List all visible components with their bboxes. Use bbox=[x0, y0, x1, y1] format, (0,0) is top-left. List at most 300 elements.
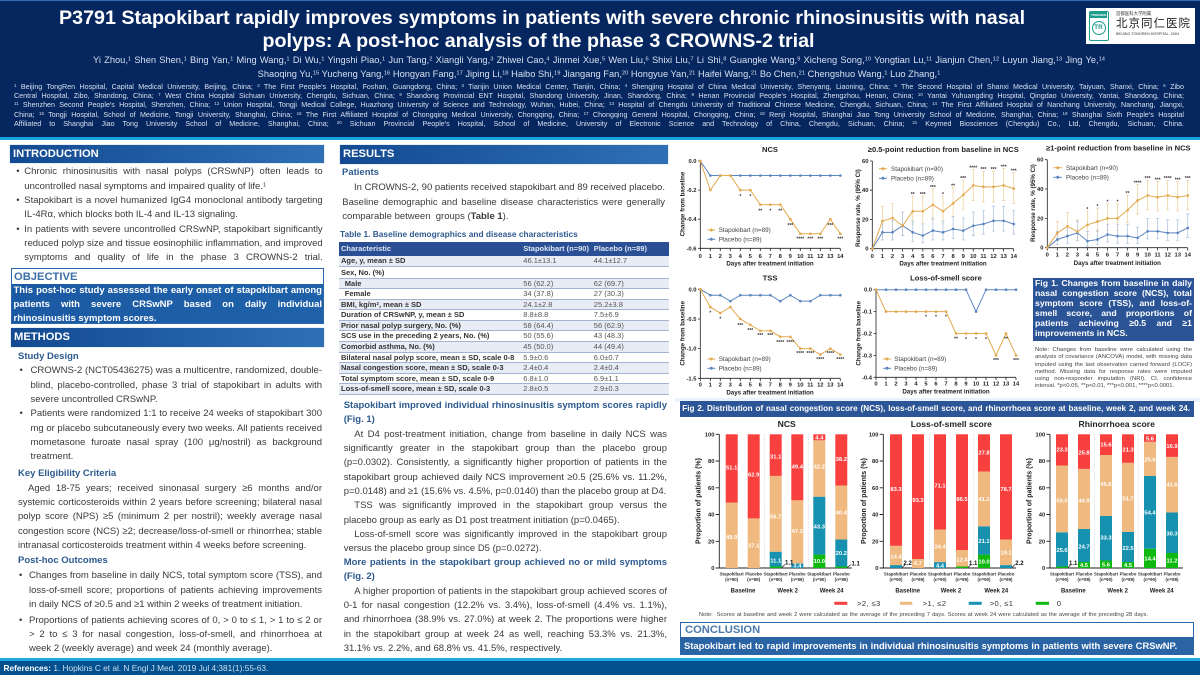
chart: TSS change from baseline: * bbox=[719, 316, 721, 322]
bar chart: NCS distribution: 1.1 bbox=[852, 562, 861, 568]
chart: at least 0.5-point reduction: 1 bbox=[881, 254, 885, 260]
text: patients summary bbox=[342, 182, 665, 222]
bar chart: loss-of-smell distribution: 71.1 bbox=[934, 483, 946, 489]
chart: TSS change from baseline: 5 bbox=[749, 382, 753, 388]
chart: at least 1-point reduction: Stapokibart (n=90) bbox=[1066, 165, 1118, 172]
bar chart: rhinorrhoea distribution: 16.9 bbox=[1166, 444, 1178, 450]
subheading: patients: Patients bbox=[342, 166, 379, 178]
authors: Shaoqing Yu,15 Yucheng Yang,16 Hongyan Fang,17 Jiping Li,18 Haibo Shi,19 Jiangang Fan,20 Hongyue Yan,21 Haifei Wang,21 Bo Chen,21 Chengshuo Wang,1 Luo Zhang,1 bbox=[258, 68, 940, 78]
table: baseline characteristics: 46.1±13.1 bbox=[523, 256, 557, 265]
chart: at least 1-point reduction: Response rate, % (95% CI) bbox=[1030, 164, 1037, 242]
chart: loss-of-smell score change: 13 bbox=[1003, 382, 1010, 388]
chart: at least 1-point reduction: 10 bbox=[1144, 252, 1151, 258]
chart: TSS change from baseline: Placebo (n=89) bbox=[719, 366, 762, 372]
chart: NCS change from baseline: -0.6 bbox=[686, 246, 697, 252]
bar chart: rhinorrhoea distribution: Placebo bbox=[1120, 572, 1137, 576]
chart: at least 1-point reduction: 11 bbox=[1155, 252, 1161, 258]
chart: at least 1-point reduction bbox=[1030, 143, 1192, 267]
chart: at least 1-point reduction: ≥1-point reduction from baseline in NCS bbox=[1046, 143, 1191, 152]
chart: at least 1-point reduction: 12 bbox=[1164, 252, 1171, 258]
text: study design bullets: CROWNS-2 (NCT05436275) was a multicentre, randomized, double- bbox=[30, 365, 322, 376]
text: fig 2 findings: in the stapokibart group at week 24 as well, reaching 53.3% vs. 21.3%, bbox=[344, 629, 667, 640]
chart: NCS change from baseline: 8 bbox=[779, 254, 783, 260]
table: baseline characteristics: 62 (69.7) bbox=[594, 279, 624, 288]
chart: TSS change from baseline: Days after treatment initiation bbox=[726, 389, 814, 396]
text: introduction bullets: In patients with severe uncontrolled CRSwNP, stapokibart significantly bbox=[24, 224, 323, 235]
text: fig 1 findings: TSS was significantly improved in the stapokibart group versus the bbox=[354, 500, 667, 511]
bar chart: loss-of-smell distribution: 4.4 bbox=[936, 563, 945, 569]
logo: Beijing Tongren Hospital bbox=[1086, 8, 1195, 44]
bar chart: NCS distribution: Stapokibart bbox=[764, 572, 788, 576]
bar chart: rhinorrhoea distribution: 4.5 bbox=[1080, 563, 1089, 569]
text: post-hoc outcome bullets bbox=[19, 570, 322, 654]
subheading: symptom scores improved: Stapokibart improved individual rhinosinusitis symptom scores rapidly bbox=[344, 400, 667, 411]
bar chart: rhinorrhoea distribution: Week 2 bbox=[1107, 588, 1129, 594]
fig 1 note: method. Missing data for response rates were imputed bbox=[1035, 369, 1192, 375]
bar chart: rhinorrhoea distribution: Placebo bbox=[1076, 572, 1093, 576]
chart: at least 1-point reduction: 60 bbox=[1037, 158, 1044, 164]
bar chart: NCS distribution: (n=89) bbox=[747, 577, 761, 582]
chart: at least 1-point reduction: 4 bbox=[1086, 252, 1090, 258]
bar chart: rhinorrhoea distribution: (n=90) bbox=[1055, 577, 1069, 582]
chart: TSS change from baseline: **** bbox=[786, 340, 794, 346]
bar chart: NCS distribution: Week 2 bbox=[777, 588, 799, 594]
chart: at least 1-point reduction: * bbox=[1117, 200, 1119, 206]
chart: NCS change from baseline: -0.4 bbox=[686, 217, 697, 223]
chart: loss-of-smell score change: * bbox=[925, 314, 927, 320]
chart: loss-of-smell score change: 3 bbox=[904, 382, 908, 388]
bar chart: loss-of-smell distribution: 86.5 bbox=[956, 497, 968, 503]
chart: at least 0.5-point reduction: 10 bbox=[970, 254, 977, 260]
title: polyps: A post-hoc analysis of the phase 3 CROWNS-2 trial bbox=[262, 30, 815, 52]
chart: at least 1-point reduction: 8 bbox=[1126, 252, 1130, 258]
title bbox=[59, 6, 1025, 52]
bar chart: loss-of-smell distribution: Baseline bbox=[895, 588, 921, 594]
bar chart: rhinorrhoea distribution: 45.6 bbox=[1100, 482, 1112, 488]
table: baseline characteristics: 2.9±0.3 bbox=[594, 384, 619, 393]
bar chart: rhinorrhoea distribution: (n=89) bbox=[1077, 577, 1091, 582]
table: baseline characteristics: Prior nasal polyp surgery, No. (%) bbox=[341, 321, 461, 330]
bar chart: loss-of-smell distribution: (n=89) bbox=[999, 577, 1013, 582]
chart: NCS change from baseline: * bbox=[769, 209, 771, 215]
chart: at least 1-point reduction: 6 bbox=[1106, 252, 1110, 258]
bar chart: NCS distribution: Stapokibart bbox=[807, 572, 832, 576]
text: study design bullets bbox=[20, 365, 322, 462]
chart: at least 1-point reduction: *** bbox=[1155, 178, 1161, 184]
text: post-hoc outcome bullets: week 2 (weekly average) and week 24 (monthly average). bbox=[29, 643, 272, 654]
chart: TSS change from baseline: -1.5 bbox=[686, 376, 697, 382]
heading: conclusion: CONCLUSION bbox=[685, 624, 760, 636]
text: study design bullets: blind, placebo-controlled, phase 3 trial of stapokibart in adults with bbox=[30, 380, 322, 391]
chart: TSS change from baseline: -1.0 bbox=[686, 347, 696, 353]
bar chart: rhinorrhoea distribution: (n=89) bbox=[1165, 577, 1179, 582]
subheading: post-hoc outcomes: Post-hoc Outcomes bbox=[18, 554, 108, 566]
bar chart: loss-of-smell distribution: Placebo bbox=[998, 572, 1015, 576]
chart: at least 0.5-point reduction: *** bbox=[960, 176, 966, 182]
fig 1 caption: smell score, and proportions of bbox=[1035, 308, 1192, 318]
chart: loss-of-smell score change: 5 bbox=[924, 382, 928, 388]
bar chart: loss-of-smell distribution bbox=[861, 419, 1024, 594]
affiliations: Central Hospital, Zibo, Shandong, China; 7 West China Hospital Sichuan University, Chengdu, Sichuan, China; 8 Shandong Provincial ENT Hospital, Shandong University, Jinan, Shandong, China; 9 Henan Provincial People's Hospital, Zhengzhou, Henan, China; 10 Yantai Yuhuangding Hospital, Qingdao University, Yantai, Shandong, China; bbox=[14, 92, 1184, 100]
chart: TSS change from baseline: 8 bbox=[779, 382, 783, 388]
table: baseline characteristics: 7.5±6.9 bbox=[594, 310, 619, 319]
table: baseline characteristics: Total symptom score, mean ± SD, scale 0-9 bbox=[341, 374, 494, 383]
chart: at least 1-point reduction: 2 bbox=[1066, 252, 1069, 258]
text: • bbox=[16, 224, 20, 235]
subheading: symptom scores improved: (Fig. 1) bbox=[344, 414, 375, 425]
table: baseline characteristics: Female bbox=[345, 289, 371, 298]
bar chart: loss-of-smell distribution: 19.1 bbox=[1000, 550, 1012, 556]
logo text: 首都医科大学附属 bbox=[1116, 11, 1151, 16]
text: objective statement: rhinosinusitis symptom scores. bbox=[14, 313, 157, 324]
bar chart: loss-of-smell distribution: 41.1 bbox=[978, 497, 990, 503]
fig 1 caption: nasal congestion score (NCS), total bbox=[1035, 288, 1192, 298]
bar chart: loss-of-smell distribution: 80 bbox=[872, 459, 878, 465]
chart: NCS change from baseline: Days after treatment initiation bbox=[726, 260, 814, 268]
chart: TSS change from baseline: **** bbox=[826, 351, 834, 357]
table: baseline characteristics: 25.2±3.8 bbox=[594, 300, 623, 309]
text: introduction bullets: uncontrolled nasal symptoms and impaired quality of life.1 bbox=[24, 181, 266, 192]
chart: at least 1-point reduction: * bbox=[1107, 200, 1109, 206]
bar chart: rhinorrhoea distribution: 5.6 bbox=[1102, 562, 1111, 568]
panel: objective bbox=[10, 268, 324, 324]
bar chart: loss-of-smell distribution: Stapokibart bbox=[884, 572, 909, 576]
bar chart: NCS distribution: (n=90) bbox=[725, 577, 739, 582]
bar chart: loss-of-smell distribution: Week 24 bbox=[984, 588, 1009, 594]
subheading: mild symptoms bbox=[344, 557, 667, 582]
heading: introduction bbox=[10, 145, 324, 163]
text: post-hoc outcome bullets: loss-of-smell score; proportions of patients achieving improvements bbox=[29, 585, 322, 596]
chart: at least 0.5-point reduction: 6 bbox=[931, 254, 935, 260]
text: fig 2 findings: 0-1 for nasal congestion (12.2% vs. 3.4%), loss-of-smell (4.4% vs. 1.1%), bbox=[344, 600, 667, 611]
chart: NCS change from baseline: 7 bbox=[769, 254, 772, 260]
bar chart: rhinorrhoea distribution: (n=89) bbox=[1121, 577, 1135, 582]
chart: loss-of-smell score change: Placebo (n=89) bbox=[894, 366, 937, 372]
text: patients summary: In CROWNS-2, 90 patients received stapokibart and 89 received placebo. bbox=[354, 182, 665, 193]
text: study design bullets: Patients were randomized 1:1 to receive 24 weeks of stapokibart 300 bbox=[30, 408, 322, 419]
fig 1 note: imputed using the last observation carried forward (LOCF) bbox=[1035, 362, 1192, 368]
bar chart: rhinorrhoea distribution: 22.5 bbox=[1122, 546, 1134, 552]
chart: at least 1-point reduction: ** bbox=[1126, 191, 1129, 197]
chart: NCS change from baseline: **** bbox=[796, 237, 804, 243]
chart: loss-of-smell score change: Change from baseline bbox=[856, 300, 862, 366]
chart: NCS change from baseline: *** bbox=[807, 237, 813, 243]
chart: loss-of-smell score change: * bbox=[945, 314, 947, 320]
text: post-hoc outcome bullets: Proportions of patients achieving scores of 0, > 0 to ≤ 1, > 1 to ≤ 2 or bbox=[29, 615, 322, 626]
bar chart: NCS distribution: 10.0 bbox=[814, 559, 825, 565]
chart: TSS change from baseline: 13 bbox=[827, 382, 834, 388]
panel: conclusion bbox=[680, 622, 1194, 655]
text: fig 1 findings: At D4 post-treatment initiation, change from baseline in daily NCS was bbox=[354, 428, 667, 440]
text: fig 2 findings: A higher proportion of patients in the stapokibart group achieved scores of bbox=[354, 586, 667, 596]
table: baseline characteristics: 44 (49.4) bbox=[594, 342, 624, 351]
chart: at least 0.5-point reduction: 4 bbox=[911, 254, 915, 260]
bar chart: loss-of-smell distribution: 0 bbox=[875, 566, 878, 572]
table: baseline characteristics: Sex, No. (%) bbox=[341, 268, 384, 277]
text: study design bullets: severe uncontrolled CRSwNP. bbox=[30, 394, 158, 405]
table: baseline characteristics: 8.8±8.8 bbox=[523, 310, 548, 319]
bar chart: rhinorrhoea distribution: 14.4 bbox=[1144, 556, 1156, 562]
table: baseline characteristics: 5.9±0.6 bbox=[523, 353, 548, 362]
bar chart: rhinorrhoea distribution: 80 bbox=[1039, 459, 1045, 465]
chart: at least 0.5-point reduction: ** bbox=[911, 192, 915, 198]
bar chart: NCS distribution bbox=[696, 419, 861, 594]
chart: at least 1-point reduction: **** bbox=[1164, 176, 1172, 182]
chart: at least 0.5-point reduction: Stapokibart (n=90) bbox=[891, 166, 943, 173]
chart: TSS change from baseline: 12 bbox=[817, 382, 824, 388]
chart: at least 1-point reduction: 7 bbox=[1116, 252, 1119, 258]
chart: loss-of-smell score change: 0.0 bbox=[864, 288, 872, 294]
chart: loss-of-smell score change: -0.4 bbox=[862, 375, 873, 381]
chart: at least 1-point reduction: 20 bbox=[1037, 216, 1044, 222]
text: • bbox=[19, 570, 22, 581]
bar chart: rhinorrhoea distribution: 0 bbox=[1042, 566, 1045, 572]
chart: loss-of-smell score change: 2 bbox=[894, 382, 898, 388]
fig 1 note: analysis of covariance (ANCOVA) model, with missing data bbox=[1035, 354, 1192, 360]
chart: TSS change from baseline: 9 bbox=[789, 382, 793, 388]
chart: loss-of-smell score change: -0.1 bbox=[862, 310, 873, 316]
bar chart: rhinorrhoea distribution: 20 bbox=[1039, 539, 1045, 545]
chart: TSS change from baseline: **** bbox=[796, 351, 804, 357]
bar chart: rhinorrhoea distribution: 5.6 bbox=[1146, 437, 1155, 443]
bar chart: rhinorrhoea distribution: 21.3 bbox=[1122, 448, 1134, 454]
bar chart: loss-of-smell distribution: Placebo bbox=[910, 572, 927, 576]
chart: NCS change from baseline: 11 bbox=[807, 254, 814, 260]
chart: NCS change from baseline: *** bbox=[837, 237, 843, 243]
text: introduction bullets: symptoms and quality of life in the phase 3 CROWNS-2 trial. bbox=[24, 252, 323, 263]
bar chart: loss-of-smell distribution: 100 bbox=[869, 432, 878, 438]
text: patients summary: comparable between groups (Table 1). bbox=[342, 211, 508, 222]
bar chart: NCS distribution: 40 bbox=[708, 513, 714, 519]
bar chart: loss-of-smell distribution: (n=90) bbox=[977, 577, 991, 582]
chart: at least 0.5-point reduction: Response rate, % (95% CI) bbox=[855, 169, 862, 247]
bar chart: NCS distribution: Week 24 bbox=[820, 588, 844, 594]
bar chart: NCS distribution: 1.1 bbox=[785, 560, 794, 566]
chart: NCS change from baseline: 10 bbox=[797, 254, 804, 260]
bar chart: rhinorrhoea distribution: 11.2 bbox=[1167, 559, 1177, 565]
text: fig 1 findings: placebo group as early as D1 post treatment initiation (p=0.0465). bbox=[344, 515, 620, 526]
subheading: key eligibility criteria: Key Eligibility Criteria bbox=[18, 468, 116, 478]
chart: loss-of-smell score change bbox=[856, 273, 1020, 396]
bar chart: loss-of-smell distribution: 1.1 bbox=[969, 561, 978, 567]
text: • bbox=[16, 195, 20, 206]
bar chart: NCS distribution: 49.4 bbox=[792, 465, 804, 471]
bar chart: NCS distribution: Stapokibart bbox=[720, 572, 744, 576]
table: baseline characteristics: 24.1±2.8 bbox=[523, 300, 552, 309]
band behind fig 2 banner bbox=[675, 398, 1200, 402]
text: eligibility criteria: Aged 18-75 years; received sinonasal surgery ≥6 months and/or bbox=[28, 482, 322, 494]
bar chart: NCS distribution: 62.9 bbox=[748, 473, 760, 479]
bar chart: loss-of-smell distribution: (n=89) bbox=[955, 577, 969, 582]
table: baseline characteristics: Characteristic bbox=[341, 244, 391, 253]
table: baseline characteristics: 2.4±0.4 bbox=[523, 363, 548, 372]
bar chart: rhinorrhoea distribution: 25.8 bbox=[1078, 450, 1090, 456]
bar chart: rhinorrhoea distribution: Stapokibart bbox=[1138, 572, 1163, 576]
table: baseline characteristics: Bilateral nasal polyp score, mean ± SD, scale 0-8 bbox=[341, 353, 514, 362]
text: post-hoc outcome bullets: in daily NCS of ≥0.5 and ≥1 within 2 weeks of treatment initiation. bbox=[29, 599, 302, 610]
bar chart: NCS distribution: (n=90) bbox=[813, 577, 826, 582]
bar chart: NCS distribution: 51.1 bbox=[726, 466, 738, 472]
text: eligibility criteria: systemic corticosteroids within 2 years before screening; bilateral nasal bbox=[18, 497, 322, 508]
heading: objective: OBJECTIVE bbox=[14, 270, 77, 282]
bar chart: rhinorrhoea distribution: Stapokibart bbox=[1050, 572, 1075, 576]
affiliations: Affiliated to Shanghai Jiao Tong University School of Medicine, Shanghai, China; 20 Sichuan Provincial People's Hospital, School of Medicine, University of Electronic Science and Technology of China, Chengdu, Sichuan, China; 21 Keymed Biosciences (Chengdu) Co., Ltd, Chengdu, Sichuan, China. bbox=[14, 120, 1184, 128]
bar chart: NCS distribution: Placebo bbox=[745, 572, 762, 576]
fig 1 note: Note: Changes from baseline were calculated using the bbox=[1035, 347, 1192, 353]
bar chart: NCS distribution: Baseline bbox=[731, 588, 756, 594]
bar chart: loss-of-smell distribution: 14.4 bbox=[890, 555, 902, 561]
bar chart: rhinorrhoea distribution: 1.1 bbox=[1069, 561, 1078, 567]
logo text: 北京同仁医院 bbox=[1116, 18, 1191, 30]
chart: NCS change from baseline: Placebo (n=89) bbox=[719, 236, 762, 244]
bar chart: NCS distribution: 0 bbox=[711, 566, 714, 572]
fig 1 note: interval. *p<0.05, **p<0.01, ***p<0.001, ****p<0.0001. bbox=[1035, 383, 1174, 389]
chart: loss-of-smell score change: * bbox=[985, 337, 987, 343]
text: conclusion statement: Stapokibart led to rapid improvements in individual rhinosinusitis symptoms in patients with severe CRSwNP. bbox=[684, 640, 1177, 651]
table: baseline characteristics: Nasal congestion score, mean ± SD, scale 0-3 bbox=[341, 363, 504, 372]
chart: at least 0.5-point reduction: ** bbox=[951, 183, 955, 189]
chart: NCS change from baseline: 5 bbox=[749, 254, 753, 260]
text: post-hoc outcome bullets: > 2 to ≤ 3 for nasal congestion, loss-of-smell, and rhinorrhoea at bbox=[29, 629, 322, 640]
bar chart: rhinorrhoea distribution: Placebo bbox=[1164, 572, 1181, 576]
text: objective statement: This post-hoc study assessed the early onset of stapokibart among bbox=[14, 284, 322, 296]
chart: at least 1-point reduction: Days after treatment initiation bbox=[1074, 260, 1161, 267]
table: baseline characteristics: 56 (62.9) bbox=[594, 321, 624, 330]
chart: loss-of-smell score change: Stapokibart (n=89) bbox=[894, 356, 946, 363]
text: study design bullets: mometasone furoate nasal spray (100 μg/nostril) as background bbox=[30, 437, 322, 448]
chart: at least 0.5-point reduction: 2 bbox=[891, 254, 894, 260]
bar chart: loss-of-smell distribution: 83.3 bbox=[890, 487, 902, 493]
bar chart: loss-of-smell distribution: 12.4 bbox=[956, 557, 968, 563]
chart: at least 0.5-point reduction: *** bbox=[920, 192, 926, 198]
bar chart: NCS distribution: 42.2 bbox=[814, 465, 825, 471]
chart: TSS change from baseline: 2 bbox=[719, 382, 722, 388]
chart: TSS change from baseline: 3 bbox=[729, 382, 733, 388]
logo text: BEIJING TONGREN HOSPITAL, CMU bbox=[1116, 32, 1179, 36]
chart: loss-of-smell score change: 9 bbox=[964, 382, 968, 388]
bar chart: rhinorrhoea distribution: 40 bbox=[1039, 513, 1045, 519]
table: baseline characteristics: BMI, kg/m2, mean ± SD bbox=[341, 300, 421, 309]
bar chart: loss-of-smell distribution: 78.7 bbox=[1000, 487, 1012, 493]
fig 1 caption: Fig 1. Changes from baseline in daily bbox=[1035, 278, 1192, 288]
heading: methods: METHODS bbox=[14, 331, 70, 343]
logo emblem: TR bbox=[1094, 24, 1103, 31]
bar chart: loss-of-smell distribution: 2.2 bbox=[1015, 561, 1024, 567]
table: baseline characteristics: Male bbox=[345, 279, 361, 288]
bar chart: loss-of-smell distribution: 24.4 bbox=[934, 545, 946, 551]
text: fig 1 findings: stapokibart group achieved daily NCS improvement ≥0.5 (25.6% vs. 11.2%, bbox=[344, 472, 667, 483]
chart: at least 1-point reduction: *** bbox=[1185, 176, 1191, 182]
text: fig 2 findings: 31.1% vs. 2.2%, and 68.8% vs. 41.5%, respectively. bbox=[344, 643, 562, 654]
affiliations: 1 Beijing TongRen Hospital, Capital Medical University, Beijing, China; 2 The First People's Hospital, Foshan, Guangdong, China; 3 Tianjin Union Medical Center, Tianjin, China; 4 Shengjing Hospital of China Medical University, Shenyang, Liaoning, China; 5 The Second Hospital of Shanxi Medical University, Taiyuan, Shanxi, China; 6 Zibo bbox=[14, 82, 1184, 90]
chart: at least 1-point reduction: Placebo (n=89) bbox=[1066, 174, 1109, 182]
chart: NCS change from baseline bbox=[680, 145, 844, 268]
chart: NCS change from baseline: 1 bbox=[709, 254, 713, 260]
bar chart: loss-of-smell distribution: Week 2 bbox=[941, 588, 962, 594]
chart: loss-of-smell score change: 6 bbox=[934, 382, 938, 388]
footer: references bbox=[0, 658, 1200, 675]
table: baseline characteristics bbox=[339, 242, 669, 395]
chart: at least 0.5-point reduction: 20 bbox=[862, 218, 868, 224]
chart: NCS change from baseline: NCS bbox=[762, 145, 778, 154]
text: fig 1 findings: significantly greater in the stapokibart group than the placebo group bbox=[344, 443, 667, 454]
chart: NCS change from baseline: 2 bbox=[719, 254, 722, 260]
subheading: symptom scores improved bbox=[344, 400, 667, 425]
bar chart: NCS distribution: 43.3 bbox=[814, 525, 826, 531]
bar chart: loss-of-smell distribution: 2.2 bbox=[904, 561, 913, 567]
table: baseline characteristics: 6.0±0.7 bbox=[594, 353, 619, 362]
text: fig 1 findings: p=0.0148) and ≥1 (15.6% vs. 4.5%, p=0.0140) than the placebo group at D4. bbox=[344, 486, 666, 497]
bar chart: rhinorrhoea distribution: 33.3 bbox=[1100, 536, 1112, 542]
chart: NCS change from baseline: Stapokibart (n=89) bbox=[719, 227, 771, 234]
chart: TSS change from baseline: -0.5 bbox=[686, 317, 697, 323]
chart: NCS change from baseline: 0.0 bbox=[688, 159, 696, 165]
chart: loss-of-smell score change: 12 bbox=[993, 382, 999, 388]
bar chart: loss-of-smell distribution: (n=90) bbox=[933, 577, 947, 582]
bar chart: rhinorrhoea distribution: Week 24 bbox=[1150, 588, 1174, 594]
chart: TSS change from baseline: *** bbox=[747, 328, 753, 334]
chart: TSS change from baseline: *** bbox=[767, 333, 773, 339]
table: baseline characteristics: SCS use in the preceding 2 years, No. (%) bbox=[341, 331, 489, 340]
text: patients summary: Baseline demographic and baseline disease characteristics were generally bbox=[342, 197, 665, 208]
table: baseline characteristics: Placebo (n=89) bbox=[594, 244, 647, 253]
text: fig 1 findings bbox=[344, 428, 667, 554]
text: study design bullets: treatment. bbox=[30, 451, 73, 462]
chart: TSS change from baseline: *** bbox=[737, 323, 743, 329]
table: baseline characteristics: 2.4±0.4 bbox=[594, 363, 619, 372]
logo emblem bbox=[1089, 11, 1109, 41]
chart: at least 0.5-point reduction: *** bbox=[1011, 169, 1017, 175]
chart: at least 1-point reduction: *** bbox=[1145, 176, 1151, 182]
chart: at least 0.5-point reduction: * bbox=[942, 192, 944, 198]
table: baseline characteristics: Stapokibart (n=90) bbox=[523, 244, 589, 253]
bar chart: rhinorrhoea distribution: 24.7 bbox=[1078, 544, 1090, 550]
footer: references: References: 1. Hopkins C et al. N Engl J Med. 2019 Jul 4;381(1):55-63. bbox=[4, 663, 268, 673]
chart: at least 0.5-point reduction: 0 bbox=[871, 254, 874, 260]
chart: loss-of-smell score change: * bbox=[935, 314, 937, 320]
chart: TSS change from baseline: 1 bbox=[709, 382, 713, 388]
chart: at least 0.5-point reduction: Placebo (n=89) bbox=[891, 176, 934, 182]
table: baseline characteristics: 34 (37.8) bbox=[523, 289, 553, 298]
chart: NCS change from baseline: 12 bbox=[817, 254, 824, 260]
chart: at least 0.5-point reduction: 3 bbox=[901, 254, 905, 260]
fig 1 note: using non-responder imputation (NRI). CI, confidence bbox=[1035, 376, 1192, 382]
chart: loss-of-smell score change: 8 bbox=[954, 382, 958, 388]
chart: NCS change from baseline: Change from baseline bbox=[680, 171, 686, 236]
table: baseline characteristics: Duration of CRSwNP, y, mean ± SD bbox=[341, 310, 464, 319]
fig 1 caption: improvements in NCS. bbox=[1035, 328, 1128, 338]
text: • bbox=[16, 166, 20, 177]
chart: at least 0.5-point reduction: 5 bbox=[921, 254, 925, 260]
chart: TSS change from baseline: **** bbox=[836, 357, 844, 363]
chart: loss-of-smell score change: 11 bbox=[983, 382, 990, 388]
table: baseline characteristics: 44.1±12.7 bbox=[594, 256, 627, 265]
bar chart: NCS distribution: 40.4 bbox=[836, 510, 848, 516]
fig 1 note bbox=[1035, 347, 1192, 389]
text: • bbox=[20, 365, 23, 376]
text: fig 1 findings: Loss-of-smell score was significantly improved in the stapokibart group bbox=[354, 529, 667, 540]
chart: loss-of-smell score change: 1 bbox=[884, 382, 888, 388]
bar chart: NCS distribution: Placebo bbox=[833, 572, 850, 576]
legend: score categories: >0, ≤1 bbox=[990, 599, 1013, 608]
bar chart: loss-of-smell distribution: 60 bbox=[872, 486, 878, 492]
text: introduction bullets: Chronic rhinosinusitis with nasal polyps (CRSwNP) often leads to bbox=[24, 166, 323, 177]
chart: at least 0.5-point reduction: *** bbox=[930, 185, 936, 191]
fig 1 caption bbox=[1033, 278, 1194, 341]
chart: NCS change from baseline: -0.2 bbox=[686, 188, 696, 194]
header accent stripe bbox=[0, 137, 1200, 140]
table title: Table 1. Baseline demographics and disease characteristics bbox=[340, 229, 578, 239]
